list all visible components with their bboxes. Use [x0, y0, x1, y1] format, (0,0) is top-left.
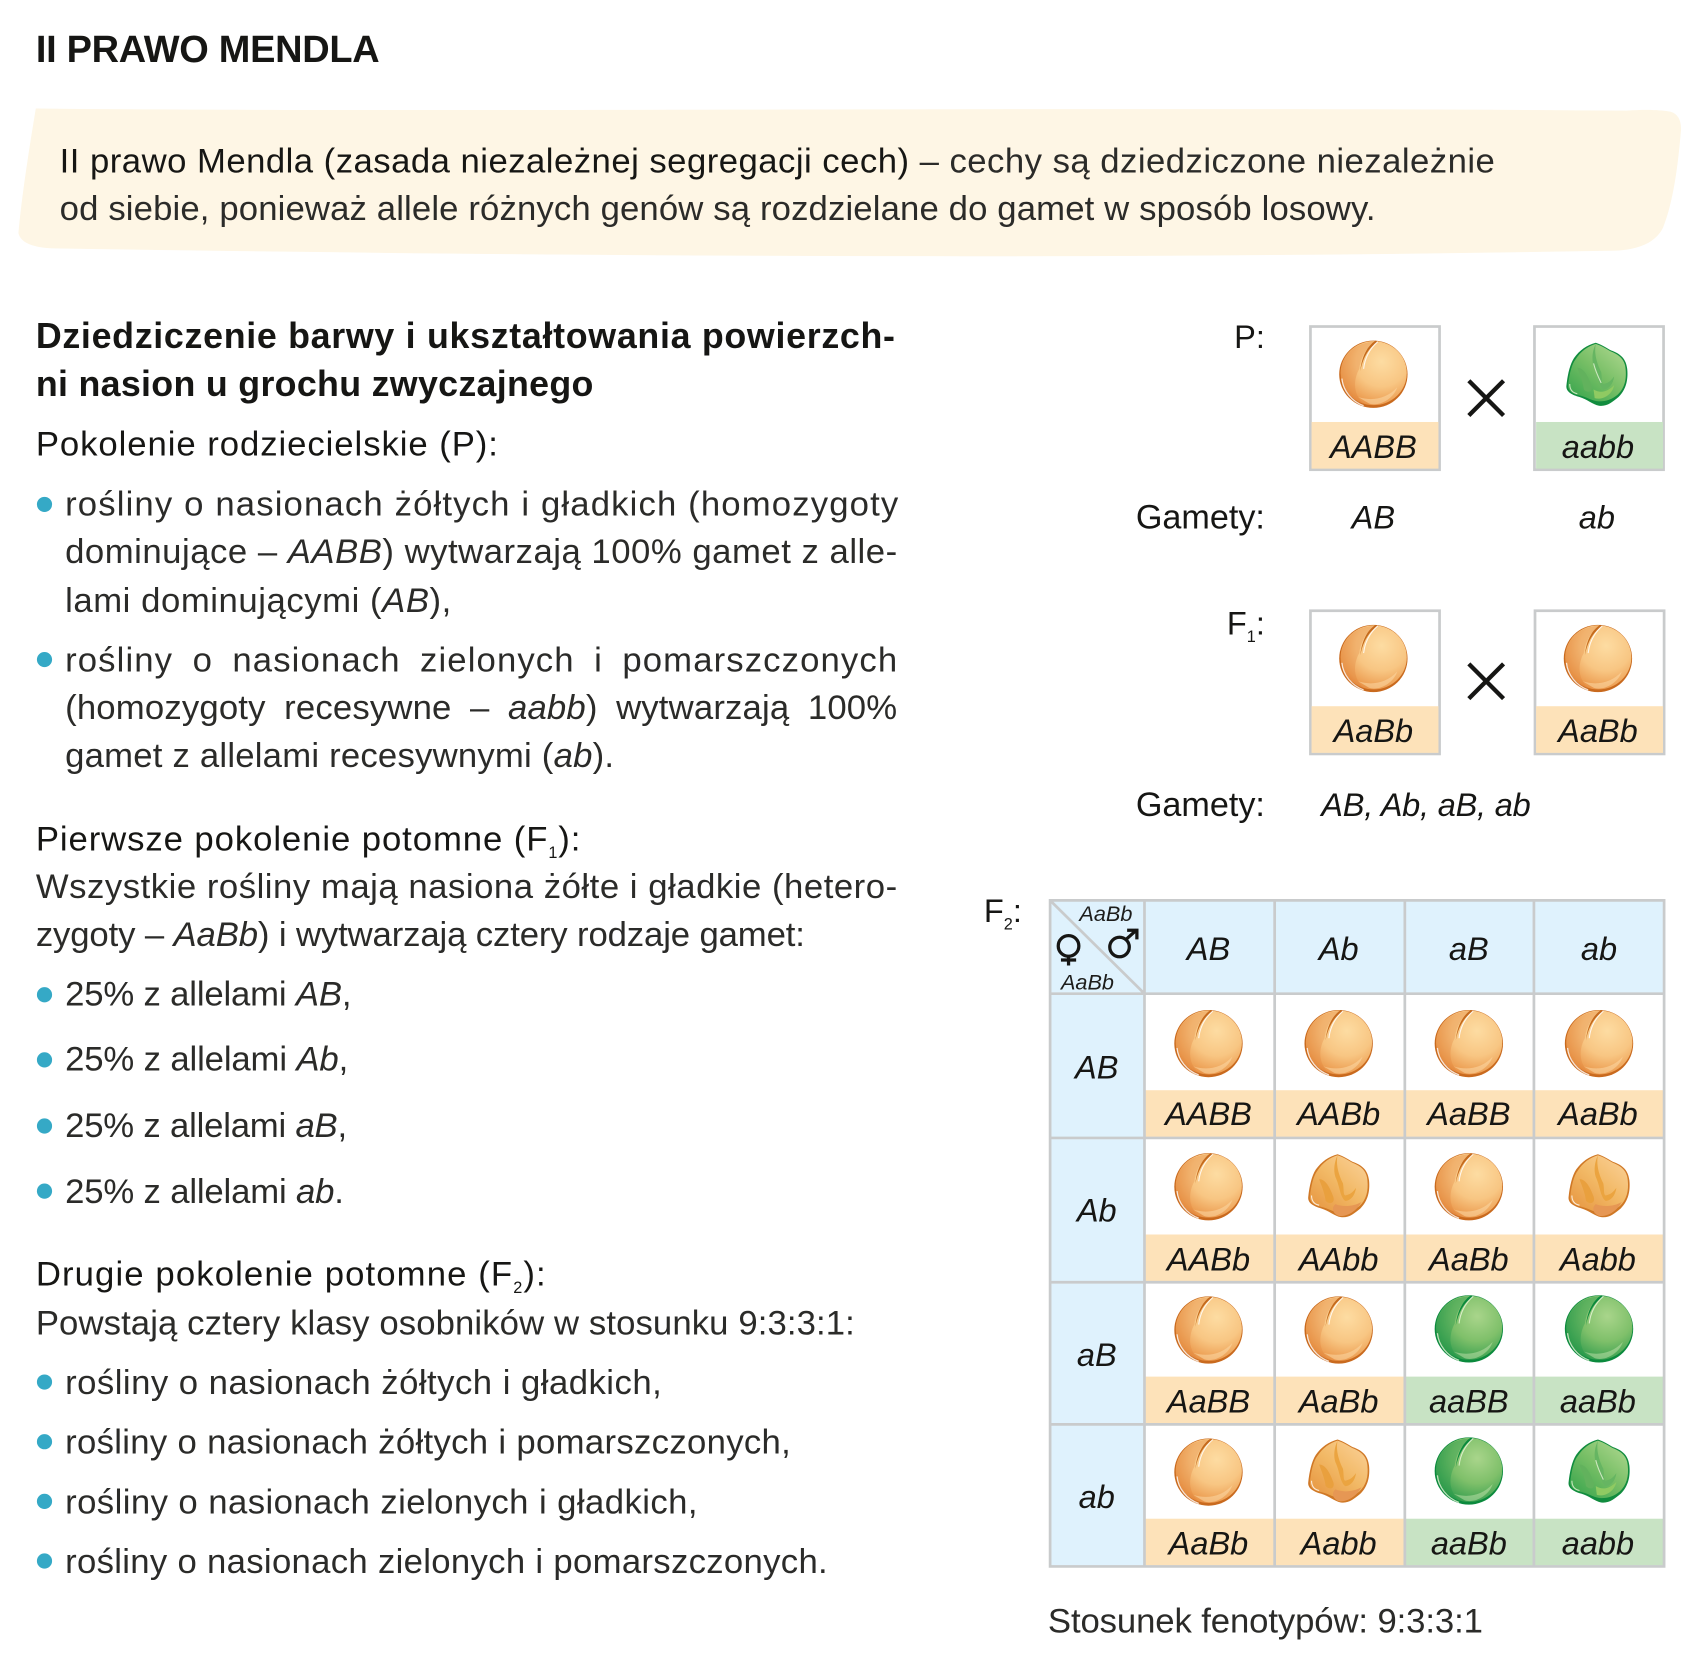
cell AaBb — [1534, 1010, 1664, 1137]
cell AaBB row 3 — [1146, 1296, 1275, 1423]
column headers — [1185, 931, 1617, 967]
column headers: Ab — [1317, 931, 1359, 967]
cell AABb — [1275, 1010, 1405, 1137]
corner: parental genotypes: AaBb — [1059, 969, 1114, 994]
gametes label: Gamety: — [1136, 786, 1265, 824]
cell aabb — [1534, 1440, 1664, 1565]
F1 description: Wszystkie rośliny mają nasiona żółte i gładkie (hetero- — [36, 868, 897, 906]
cell AaBB — [1405, 1010, 1534, 1137]
cell Aabb row 4 — [1275, 1440, 1405, 1565]
F1 description — [36, 868, 897, 954]
label P: P: — [1234, 319, 1265, 355]
cell aabb: aabb — [1562, 1526, 1634, 1562]
subheading F2: ): — [523, 1255, 546, 1293]
definition text line 2: od siebie, ponieważ allele różnych genów są rozdzielane do gamet w sposób losowy. — [60, 190, 1376, 228]
label F1: F — [1227, 606, 1247, 642]
icon: female symbol — [1058, 936, 1079, 965]
cell aaBb row 4: aaBb — [1431, 1526, 1507, 1562]
cell AaBb: AaBb — [1556, 1096, 1638, 1132]
panel: F1 cross — [1136, 606, 1664, 824]
heading: inheritance: ni nasion u grochu zwyczajnego — [36, 364, 593, 404]
panel: definition callout — [18, 108, 1681, 256]
bullet 1 text: lami dominującymi (AB), — [65, 582, 451, 620]
label F2: F — [984, 893, 1004, 929]
F1 description: zygoty – AaBb) i wytwarzają cztery rodzaje gamet: — [36, 916, 805, 954]
bullet 1 marker — [37, 497, 52, 512]
F1 parent left: AaBb — [1332, 713, 1413, 749]
cell AABb: AABb — [1295, 1096, 1380, 1132]
cell aaBB — [1405, 1295, 1534, 1423]
definition text line 1: II prawo Mendla (zasada niezależnej segregacji cech) – cechy są dziedziczone niezależnie — [60, 142, 1495, 180]
cell AaBb row 4 — [1146, 1438, 1275, 1565]
gamete list: 25% z allelami aB, — [65, 1107, 347, 1145]
column headers: aB — [1449, 931, 1489, 967]
text block: F2 generation — [36, 1255, 855, 1581]
label F2: 2 — [1004, 916, 1013, 934]
cell AaBb row 2 — [1405, 1153, 1534, 1281]
phenotype list: rośliny o nasionach zielonych i gładkich, — [65, 1483, 698, 1521]
text block: parental generation — [36, 426, 899, 775]
cell aaBb row 4 — [1405, 1437, 1534, 1565]
callout background — [18, 108, 1681, 256]
bullet 1 text — [65, 485, 899, 620]
cell AaBb row 2: AaBb — [1427, 1241, 1509, 1277]
cell AaBb row 3 — [1275, 1296, 1405, 1423]
F1 parent right: AaBb — [1556, 713, 1638, 749]
cell Aabb row 4: Aabb — [1299, 1526, 1377, 1562]
header background — [1050, 900, 1664, 1566]
subheading P: Pokolenie rodziecielskie (P): — [36, 426, 498, 464]
title: II PRAWO MENDLA — [36, 29, 380, 71]
bullet 2 marker — [37, 652, 52, 667]
phenotype list — [37, 1364, 828, 1581]
cross symbol — [1469, 381, 1504, 415]
bullet 2 text: (homozygoty recesywne – aabb) wytwarzają 100% — [65, 689, 897, 727]
cell AaBb row 4: AaBb — [1167, 1526, 1248, 1562]
bullet 2 text — [65, 641, 897, 775]
gametes label: Gamety: — [1136, 498, 1265, 536]
row headers: ab — [1079, 1479, 1115, 1515]
gamete ab: ab — [1579, 499, 1615, 535]
heading: inheritance — [36, 316, 895, 404]
subheading F1: Pierwsze pokolenie potomne (F — [36, 820, 547, 858]
cell AABb row 2: AABb — [1165, 1241, 1250, 1277]
parent aabb — [1534, 327, 1664, 470]
cell AABb row 2 — [1146, 1153, 1275, 1281]
panel: parental cross — [1136, 319, 1664, 536]
phenotype list: rośliny o nasionach zielonych i pomarszczonych. — [65, 1543, 828, 1581]
gamete list: 25% z allelami Ab, — [65, 1041, 348, 1079]
bullet 2 text: gamet z allelami recesywnymi (ab). — [65, 737, 614, 775]
bullet 1 text: rośliny o nasionach żółtych i gładkich (homozygoty — [65, 485, 899, 523]
cell AABB — [1146, 1010, 1275, 1137]
cell aaBb: aaBb — [1560, 1383, 1636, 1419]
label F1: 1 — [1247, 628, 1256, 646]
cell aaBb — [1534, 1295, 1664, 1423]
corner: parental genotypes — [1058, 901, 1137, 994]
F1 gametes: AB, Ab, aB, ab — [1319, 787, 1531, 823]
cell AAbb: AAbb — [1297, 1241, 1378, 1277]
label F1: : — [1256, 606, 1265, 642]
cell AaBb row 3: AaBb — [1297, 1383, 1378, 1419]
subheading F2: Drugie pokolenie potomne (F — [36, 1255, 512, 1293]
column headers: ab — [1581, 931, 1617, 967]
subheading F1: 1 — [548, 844, 557, 862]
column headers: AB — [1185, 931, 1230, 967]
cell AaBB: AaBB — [1425, 1096, 1510, 1132]
F2 description: Powstają cztery klasy osobników w stosunku 9:3:3:1: — [36, 1304, 855, 1342]
cell Aabb: Aabb — [1558, 1241, 1636, 1277]
cell Aabb — [1534, 1154, 1664, 1281]
cell AABB: AABB — [1163, 1096, 1252, 1132]
gamete list: 25% z allelami ab. — [65, 1173, 344, 1211]
F1 parent left — [1310, 611, 1440, 754]
parent aabb: aabb — [1562, 429, 1634, 465]
gamete list: 25% z allelami AB, — [65, 976, 351, 1014]
subheading F1: ): — [558, 820, 580, 858]
corner: parental genotypes: AaBb — [1077, 901, 1132, 926]
cross symbol — [1469, 664, 1504, 699]
row headers: aB — [1077, 1337, 1117, 1373]
phenotype list: rośliny o nasionach żółtych i gładkich, — [65, 1364, 662, 1402]
icon: male symbol — [1110, 930, 1137, 957]
bullet 2 text: rośliny o nasionach zielonych i pomarszczonych — [65, 641, 897, 679]
cell aaBB: aaBB — [1429, 1383, 1509, 1419]
bullet 1 text: dominujące – AABB) wytwarzają 100% gamet z alle- — [65, 533, 897, 571]
row headers: AB — [1073, 1049, 1118, 1085]
F1 parent right — [1535, 611, 1664, 754]
gamete AB: AB — [1350, 499, 1395, 535]
gamete list — [37, 976, 351, 1211]
row headers: Ab — [1075, 1192, 1117, 1228]
panel: Punnett square — [1050, 900, 1664, 1566]
cell AaBB row 3: AaBB — [1165, 1383, 1250, 1419]
cell AAbb — [1275, 1154, 1405, 1281]
parent AABB — [1310, 327, 1440, 470]
parent AABB: AABB — [1328, 429, 1417, 465]
text block: F1 generation — [36, 820, 897, 1211]
label F2: : — [1013, 893, 1022, 929]
heading: inheritance: Dziedziczenie barwy i ukształtowania powierzch- — [36, 316, 895, 356]
subheading F2: 2 — [513, 1279, 522, 1297]
phenotype ratio caption: Stosunek fenotypów: 9:3:3:1 — [1048, 1603, 1483, 1641]
row headers — [1073, 1049, 1118, 1515]
phenotype list: rośliny o nasionach żółtych i pomarszczonych, — [65, 1424, 791, 1462]
